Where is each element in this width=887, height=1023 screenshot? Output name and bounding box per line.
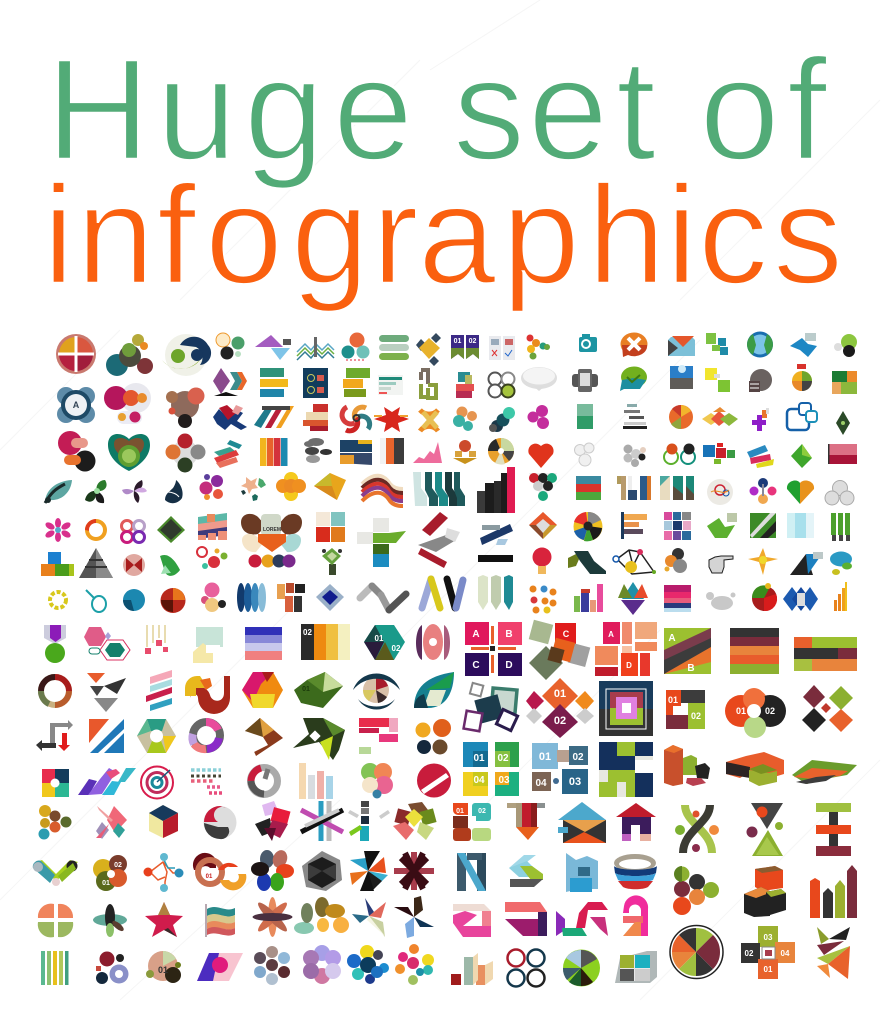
icon: diagonal panel: B: [687, 663, 695, 674]
icon: magenta bubbles: [200, 474, 223, 500]
icon: bars orange: [277, 583, 305, 612]
icon: pink black circles: [58, 431, 96, 472]
icon: triangle burst: [350, 851, 388, 891]
icon: dark strip: [568, 551, 606, 574]
icon: grid squares: [664, 512, 691, 540]
icon: beige red stack: [303, 404, 328, 431]
icon: red sphere: [160, 588, 186, 613]
icon: blob trio: 01: [736, 706, 746, 716]
icon: hexagon cluster: [216, 333, 244, 360]
icon: four columns: [260, 438, 288, 466]
icon: segmented pie: [488, 438, 514, 465]
icon: eye: [353, 674, 400, 710]
icon: pyramid: [79, 548, 113, 578]
icon: purple bookmark and green circle: [44, 625, 66, 663]
icon: ABCD squares: D: [505, 660, 513, 671]
icon: green fold: [707, 513, 737, 538]
icon: globe: [747, 332, 773, 358]
icon: waves: [362, 476, 403, 506]
icon: arrow bars: [810, 865, 857, 918]
icon: blob trio: [725, 688, 786, 738]
icon: blue diamonds: [783, 587, 818, 611]
icon: four diamonds: [802, 685, 853, 732]
icon: triangles: [618, 582, 648, 615]
icon: dark butterfly: [394, 896, 434, 938]
icon: blue arrows: [790, 333, 817, 357]
icon: teal four lobed ring: A: [73, 400, 80, 410]
icon: pastel blobs: [294, 897, 349, 934]
icon: dot cluster: [526, 334, 550, 360]
icon: four rings: [488, 372, 514, 398]
icon: parallelogram: [197, 953, 243, 981]
icon: rotated squares: C: [563, 629, 570, 639]
icon: rotated squares: [529, 620, 590, 680]
icon: curved stripes: [747, 445, 774, 468]
icon: cross panel: [741, 926, 795, 979]
icon: diagonal stripes: [254, 406, 294, 428]
icon: orange ring: [85, 519, 107, 541]
icon: target: [141, 766, 173, 798]
icon: heart green: [108, 434, 150, 471]
icon: rounded quad: 01: [456, 808, 464, 815]
icon: four blocks: 02: [497, 753, 509, 764]
icon: dark teal links: [489, 407, 515, 432]
icon: red hexes: [197, 547, 228, 569]
icon: flower squares: [393, 802, 437, 840]
icon: big pie: [670, 926, 723, 978]
icon: hand pointer: [709, 556, 733, 573]
icon: purple orange chevrons: [213, 368, 247, 396]
icon: cube: [149, 805, 178, 838]
icon: hexagon 01 02: 01: [375, 634, 384, 643]
icon: diagonal green: [750, 513, 776, 538]
icon: column panel 02: 02: [303, 628, 312, 637]
icon: blue speech bubbles: [830, 552, 852, 575]
icon: road photo: [670, 365, 693, 389]
icon: teal bricks: [348, 801, 390, 841]
icon: green propeller: [85, 480, 107, 503]
icon: blue folds: [566, 853, 598, 892]
icon: sphere black: [834, 334, 857, 357]
icon: circles row: [248, 554, 296, 568]
icon: color wheel: [574, 512, 602, 541]
icon: red green star: [752, 583, 777, 611]
icon: mosaic: [595, 622, 657, 676]
icon: pink flower: [44, 518, 72, 542]
icon: purple flower: [303, 945, 341, 984]
icon: ribbon red: [505, 902, 547, 936]
icon: rings green: [664, 444, 695, 464]
icon: four tiles: 01: [539, 751, 551, 763]
icon: purple black propeller: [122, 480, 147, 503]
icon: green swirl: [160, 555, 180, 576]
icon: pastel bars: [299, 763, 333, 799]
icon: bowl: [614, 854, 657, 889]
icon: grey circles: [624, 444, 646, 467]
icon: green dark star: [293, 718, 345, 760]
icon: ABCD squares: A: [472, 629, 480, 640]
icon: triangle circles: [529, 473, 557, 501]
icon: pointed columns: [478, 575, 513, 610]
icon: star burst: [748, 548, 778, 575]
icon: red heart: [528, 444, 554, 468]
icon: navy diamond: [316, 584, 344, 611]
icon: green orange blocks: [832, 371, 857, 394]
icon: asterisk bars: [301, 801, 343, 841]
icon: blue triangle: [790, 552, 823, 575]
icon: small circle group: [38, 805, 72, 840]
icon: V shape: [33, 860, 78, 886]
icon: magenta hexes: [528, 405, 549, 429]
icon: rainbow rings: [122, 520, 144, 542]
icon: four circles diamond: [166, 434, 206, 472]
icon: maroon star: [394, 852, 434, 890]
icon: dots rows: [191, 770, 223, 793]
icon: orange pie: [669, 405, 693, 429]
icon: three bar panel: [794, 637, 857, 671]
icon: butterfly: [241, 514, 302, 552]
icon: hexagon 01 02: 02: [392, 644, 401, 653]
icon: camera: [579, 334, 597, 352]
icon: ribbon 9: [623, 895, 648, 936]
icon: dark bars list: [623, 404, 647, 429]
icon: bookmarks 01 02: 02: [469, 338, 476, 345]
icon: crimson banned circle: [417, 764, 451, 798]
icon: four blocks: 03: [498, 775, 510, 786]
icon: circle cluster half: [673, 866, 719, 915]
icon: network: [613, 549, 656, 574]
icon: four blocks: 01: [473, 753, 485, 764]
icon: cross panel: 02: [745, 949, 754, 958]
icon: teal bird: [86, 590, 106, 612]
icon: purple circles: [750, 478, 776, 504]
icon: ABCD squares: [465, 622, 522, 676]
icon: four ring lens: [508, 950, 544, 986]
icon: red blue arrows: [213, 405, 247, 430]
icon: dark hex: [302, 851, 342, 891]
icon: grey blobs: [304, 438, 332, 463]
icon: heart green orange: [787, 481, 814, 504]
icon: hex cluster 02: 02: [114, 862, 122, 869]
icon: rounded bars: [379, 335, 409, 360]
icon: rounded quad: 02: [478, 808, 486, 815]
icon: green diamonds: [294, 672, 343, 708]
icon: blue sphere: [123, 589, 145, 611]
icon: red star: [374, 407, 409, 432]
icon: vertical stripes: [41, 951, 68, 985]
icon: diamonds 01 02: 01: [554, 688, 566, 700]
icon: hexagon 01 02: [364, 625, 405, 660]
icon: zigzag lines: [297, 337, 334, 360]
icon: star squares: [255, 801, 291, 841]
icon: mosaic: A: [608, 630, 614, 639]
icon: green speech: [620, 366, 647, 391]
icon: navy strips: [478, 524, 513, 562]
icon: diamonds 01 02: 02: [554, 715, 566, 727]
icon: green diamonds: 01: [302, 686, 310, 693]
icon: quad panel: 02: [691, 711, 701, 721]
icon: 3d stacks: [726, 752, 784, 786]
icon: speech x: [620, 332, 648, 357]
icon: diamonds 01 02: [526, 678, 594, 738]
icon: colour grid: [599, 742, 653, 797]
icon: cross circle: [56, 334, 96, 374]
icon: grey speech: [521, 367, 557, 391]
icon: diagonal panel: [664, 628, 711, 674]
icon: petal flower: [251, 848, 294, 891]
icon: wavy paper: [792, 760, 857, 784]
icon: swirl circle: [162, 334, 211, 376]
icon: blue flower: [347, 945, 389, 984]
icon: 3d cube panel: [615, 951, 657, 983]
icon: I shape: [816, 803, 851, 856]
icon: cross panel: 03: [764, 933, 773, 942]
icon: envelope: [668, 336, 695, 356]
icon: U snake: [185, 676, 230, 714]
icon: ribbon fold pink: [453, 904, 491, 937]
icon: triangle arrows: [87, 673, 126, 712]
icon: cubes stacked: [744, 866, 786, 917]
icon: teal hbars: [378, 375, 403, 395]
icon: quad panel: 01: [668, 695, 678, 705]
icon: red bulb: [532, 548, 552, 574]
icon: four tiles: [532, 743, 588, 794]
icon: glass panel: [787, 513, 814, 538]
icon: green tree: [322, 548, 342, 575]
icon: check cards: [489, 336, 515, 360]
icon: navy yellow panels: [340, 440, 372, 465]
icon: pink area chart: [413, 442, 442, 463]
icon: pie flag: [792, 364, 812, 391]
icon: color squares: [706, 333, 728, 355]
icon grid: all infographic thumbnails: [33, 332, 857, 986]
icon: orange hbars: [621, 512, 647, 539]
icon: bar columns: [574, 584, 603, 612]
icon: chain: [421, 370, 436, 398]
icon: X ribbon: [675, 805, 719, 853]
icon: red double rings: [193, 853, 246, 890]
icon: navy square circles: [303, 368, 328, 398]
icon: green gold stacks: [343, 368, 370, 397]
icon: green kite: [791, 444, 812, 468]
icon: brown cluster: [166, 388, 204, 428]
icon: grey three circles: [825, 480, 854, 505]
icon: ABCD squares: B: [505, 629, 513, 640]
icon: house: [616, 803, 656, 841]
icon: orange people: [453, 440, 477, 464]
icon: magenta stripes: [664, 585, 691, 612]
icon: teal four lobed ring: [57, 387, 95, 423]
icon: bars columns: [617, 476, 651, 500]
icon: grey red arrows: [36, 720, 73, 751]
icon: hexes cross: [254, 946, 290, 985]
icon: big pie circles: 01: [158, 965, 168, 975]
icon: big pie circles: [146, 951, 181, 983]
icon: clover: [38, 904, 73, 937]
icon: pink hex teal: [84, 627, 130, 660]
icon: red double rings: 01: [206, 874, 213, 880]
icon: green tags: [831, 513, 850, 541]
icon: orange yellow circles: [276, 472, 306, 501]
icon: navy spiral: [165, 480, 183, 503]
icon: orange x: [420, 410, 438, 431]
icon: gold diamonds: [416, 333, 441, 366]
icon: four tiles: 04: [535, 778, 547, 789]
icon: ellipse cross: [93, 904, 127, 937]
icon: hex magenta orange: [242, 672, 283, 708]
icon: petal rosette: [252, 897, 292, 937]
icon: crimson panel: [828, 444, 857, 464]
icon: teal columns: [660, 476, 694, 500]
icon: hourglass: [746, 803, 783, 856]
icon: S panel: [509, 855, 543, 887]
icon: green cross: [357, 518, 406, 567]
icon: tilted frames: [464, 683, 518, 731]
icon: star: [145, 902, 183, 937]
icon: grey segmented ring: [250, 768, 278, 794]
icon: grey V: [360, 586, 406, 610]
icon: overlapping circles: [361, 763, 393, 798]
icon: origami: [817, 927, 850, 979]
icon: W ribbon: [556, 902, 608, 936]
icon: rounded quad: [453, 803, 491, 841]
icon: rising bars: [477, 467, 515, 513]
icon: star cluster: [241, 477, 266, 501]
icon: N bars: [422, 579, 463, 608]
icon: red teal stack: [214, 440, 242, 468]
icon: leaf: [414, 672, 454, 708]
icon: diag wave: [78, 768, 136, 795]
icon: blob trio: 02: [765, 706, 775, 716]
icon: hexagon petal: [137, 719, 176, 753]
icon: butterfly: LOREM: [263, 527, 281, 533]
icon: pink arrows: [96, 806, 127, 839]
icon: four blocks: [463, 742, 519, 796]
icon: grey circle list: [749, 369, 772, 392]
icon: nested square: [599, 681, 653, 736]
icon: mosaic: D: [626, 661, 632, 670]
icon: circle swirl: [204, 806, 236, 839]
icon: green pie: [563, 950, 600, 986]
icon: diagonal panel: A: [668, 633, 676, 644]
icon: magenta circles: [104, 383, 151, 424]
icon: bookmarks 01 02: [451, 335, 479, 359]
icon: orange cross accent: [762, 408, 769, 418]
icon: green dark diamond: [157, 516, 185, 543]
icon: gold kite: [314, 473, 346, 500]
icon: blue red green squares: [703, 443, 735, 464]
icon: wave flag: [205, 904, 235, 937]
icon: teal black swirl: [45, 480, 72, 503]
icon: pink ellipse: [416, 624, 450, 660]
icon: green diamond: [836, 411, 850, 435]
icon: four circles: [416, 719, 451, 754]
icon: diamond row: [702, 407, 738, 426]
icon: grid panels: [576, 476, 601, 500]
icon: circle cluster: [106, 334, 153, 376]
icon: cubes: [41, 552, 74, 576]
icon: multicolor flower: [395, 944, 434, 985]
icon: orange dark card: [380, 438, 404, 464]
icon: teal dark chevron bars: [413, 472, 465, 506]
icon: brown kite: [245, 718, 283, 756]
icon: red white sphere: [123, 554, 145, 576]
icon: 3d boxes: [664, 745, 710, 786]
icon: white hexes: [574, 443, 594, 466]
icon: grey device: [572, 369, 598, 392]
icon: ABCD squares: C: [472, 660, 480, 671]
icon: diag orange blue: [89, 719, 124, 753]
icon: pale green panel: [193, 627, 223, 663]
icon: grey ring: [192, 722, 220, 749]
icon: swirl cross: [342, 407, 370, 431]
icon: sticky notes: [705, 368, 730, 392]
icon: color squares quad: [316, 512, 345, 542]
icon: blue stripes panel: [245, 627, 282, 660]
icon: stacked tabs: [260, 368, 288, 397]
icon: multi stripes: [198, 513, 227, 540]
icon: white swirl circle: [707, 479, 733, 505]
icon: four tiles: 03: [569, 776, 581, 788]
icon: cross panel: 01: [764, 965, 773, 974]
icon: network teal: [144, 853, 184, 892]
icon: gears: [664, 548, 687, 573]
icon: green card: [577, 404, 593, 429]
icon: column panel 02: [301, 624, 350, 660]
icon: diag bars: [146, 670, 172, 711]
icon: teal orange gears: [453, 406, 477, 431]
icon: three bubbles: [342, 332, 370, 360]
icon: blue ellipses: [237, 583, 266, 612]
icon: segmented ring: [41, 677, 69, 705]
icon: purple blue triangles: [255, 335, 291, 360]
icon: puzzle: [42, 769, 69, 797]
icon: stripes panel: [730, 628, 779, 674]
icon: quad panel: [666, 690, 705, 729]
icon: 3d columns: [451, 953, 493, 985]
icon: colored stack: [456, 372, 474, 398]
icon: yellow spiral: [50, 592, 66, 608]
icon: envelope house: [558, 802, 606, 843]
icon: N panel: [457, 853, 486, 891]
icon: hex cluster 02: [93, 855, 127, 891]
icon: pinwheel: [352, 898, 386, 937]
icon: pink red panels: [359, 718, 398, 754]
title: Huge set of: Huge set of: [46, 29, 828, 190]
icon: cross panel: 04: [781, 949, 790, 958]
icon: magenta cross: [752, 415, 766, 431]
icon: bookmarks 01 02: 01: [454, 338, 461, 345]
icon: grey cloud: [706, 592, 736, 610]
icon: crimson strips: [418, 512, 460, 568]
icon: four blocks: 04: [473, 775, 485, 786]
icon: lines pink: [145, 625, 168, 654]
icon: circles navy: [96, 952, 128, 984]
icon: pencil: [507, 803, 545, 840]
title: infographics: infographics: [43, 156, 843, 313]
icon: hex cluster 02: 01: [102, 880, 110, 887]
icon: blue rounded shape: [787, 403, 817, 430]
icon: four tiles: 02: [572, 752, 584, 763]
icon: orange bars: [834, 582, 847, 611]
icon: hexagon ring: [529, 512, 557, 539]
icon: orange circles network: [530, 586, 556, 614]
icon: pink gold hexes: [201, 582, 226, 612]
